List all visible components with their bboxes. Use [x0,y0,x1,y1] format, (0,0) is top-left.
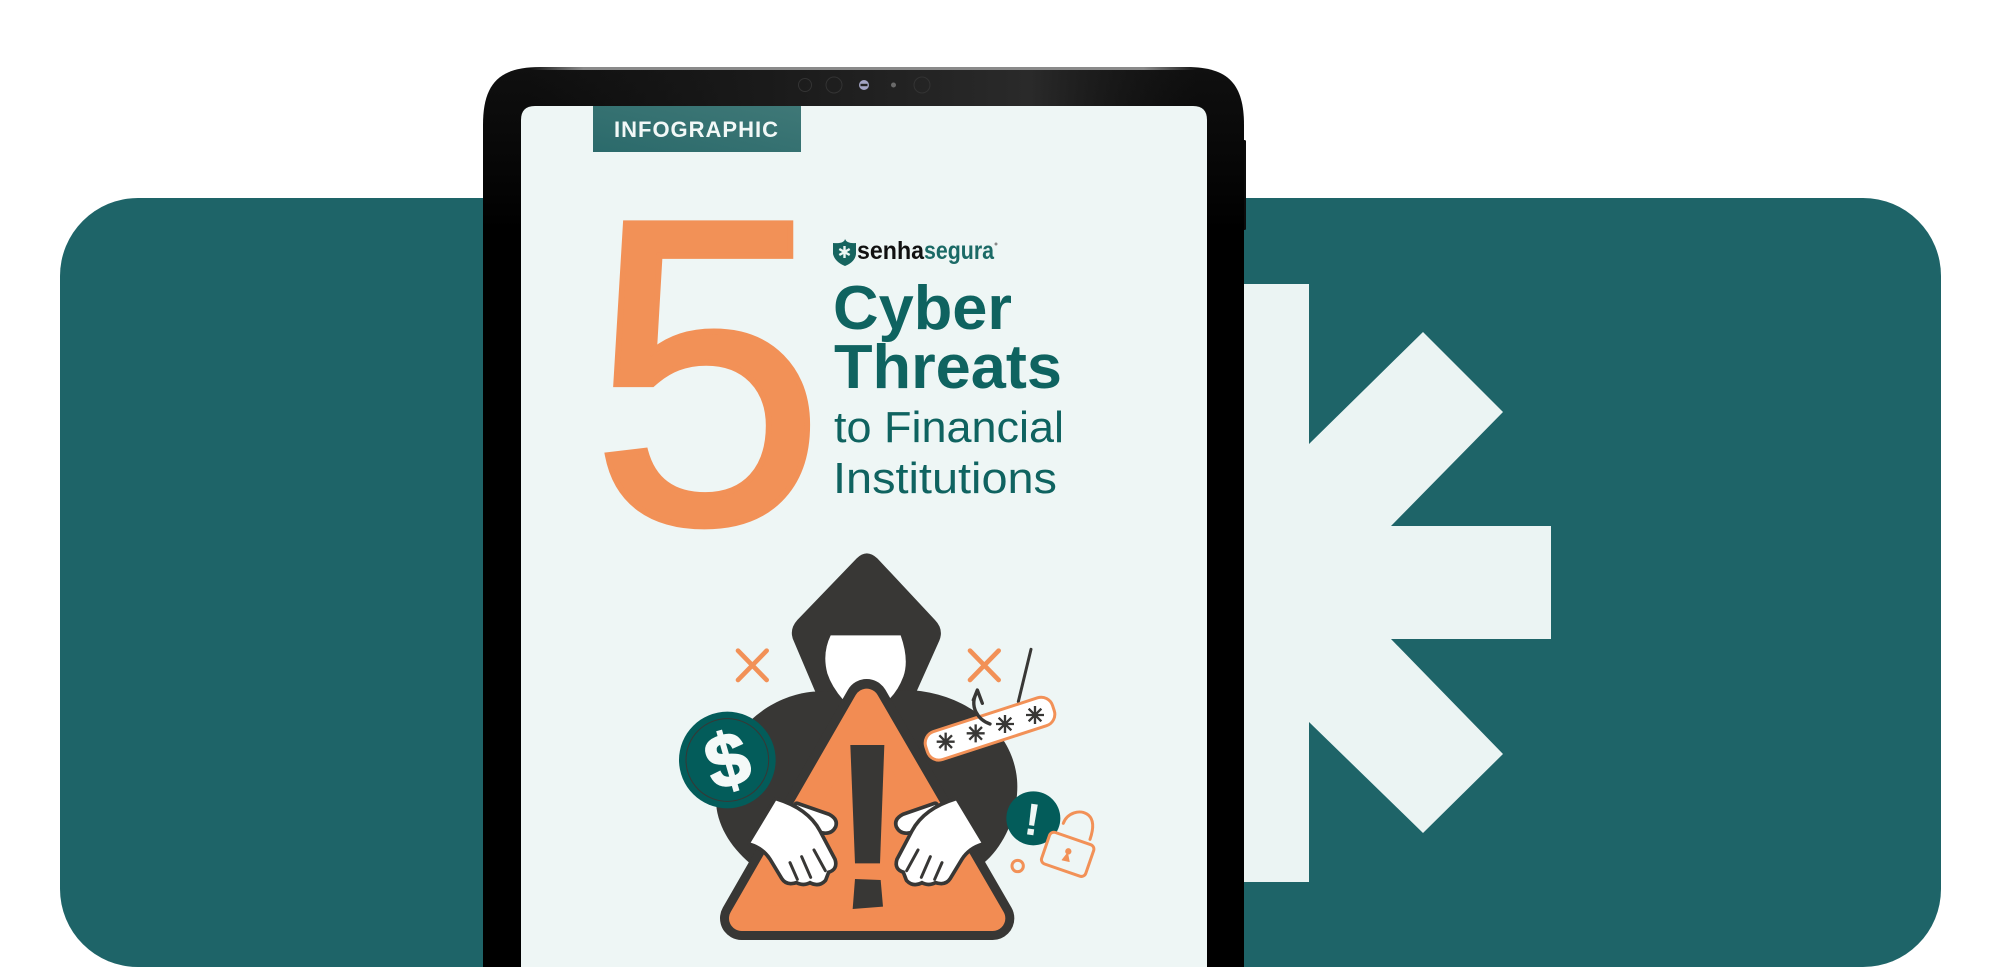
big numeral 5: 5 [591,129,825,615]
title: Cyber [833,273,1012,343]
illustration: hacker with warning sign [679,553,1095,918]
tag: infographic: INFOGRAPHIC [614,117,778,142]
icon: alert circle: ! [1022,793,1043,846]
password field [922,694,1058,763]
hacker face [825,635,906,700]
title: Threats [834,332,1062,402]
icon: dollar coin [679,712,776,808]
hacker body [716,691,1017,863]
tablet device [483,67,1246,967]
tablet camera [798,77,930,93]
subtitle [833,403,1064,503]
icon: alert circle [1006,791,1060,846]
subtitle: to Financial [834,403,1064,452]
tablet screen [521,106,1207,967]
panel: teal background [60,198,1941,967]
warning triangle [742,701,993,918]
icon: large asterisk [1196,284,1551,882]
warning exclamation mark [850,745,884,909]
logo: senhasegura [833,237,998,266]
tag: infographic [593,106,801,152]
arrow [973,690,990,724]
icon: dollar coin: $ [696,714,759,806]
icon: small ring [1012,860,1023,872]
tablet top bezel [530,69,1197,106]
top edge highlight [530,67,1197,70]
logo: senhasegura: senha [857,237,925,265]
icon: padlock [1040,812,1095,878]
tablet body [483,67,1244,967]
icon: cursor line [1018,649,1031,702]
icon: right x mark [970,651,999,680]
subtitle: Institutions [833,454,1057,503]
icon: left x mark [738,651,767,680]
side button [1242,140,1246,230]
icon: logo shield [833,239,856,266]
hacker hood [792,553,941,695]
logo: senhasegura: segura [924,237,995,265]
left hand [751,801,834,883]
title [833,273,1062,402]
right hand [898,801,981,883]
